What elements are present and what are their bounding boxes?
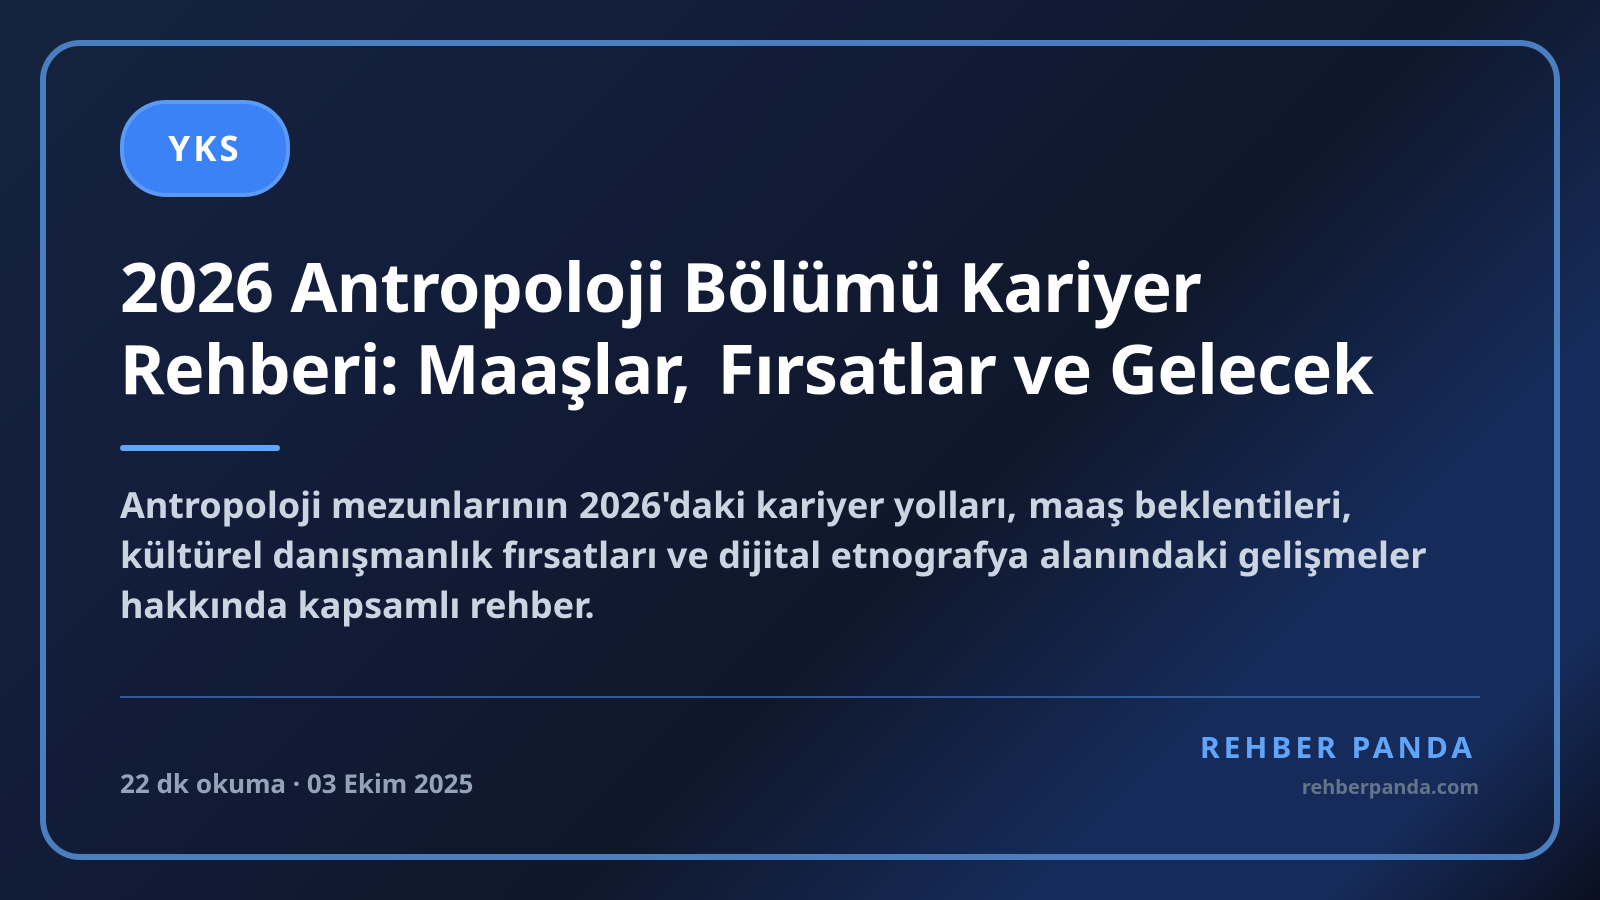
brand name: REHBER PANDA	[1200, 726, 1476, 767]
badge: YKS: YKS	[168, 125, 242, 172]
description text	[120, 480, 1426, 629]
description text: hakkında kapsamlı rehber.	[120, 580, 595, 629]
description text: Antropoloji mezunlarının 2026'daki kariyer yolları, maaş beklentileri,	[120, 480, 1352, 529]
badge: YKS	[120, 100, 290, 197]
accent bar	[120, 445, 280, 451]
reading time and date: 22 dk okuma · 03 Ekim 2025	[120, 765, 473, 801]
title	[120, 239, 1374, 414]
title: 2026 Antropoloji Bölümü Kariyer	[120, 239, 1201, 332]
divider	[120, 696, 1480, 698]
title: Rehberi: Maaşlar, Fırsatlar ve Gelecek	[120, 321, 1373, 414]
description text: kültürel danışmanlık fırsatları ve dijital etnografya alanındaki gelişmeler	[120, 530, 1426, 579]
website: rehberpanda.com	[1302, 773, 1479, 800]
